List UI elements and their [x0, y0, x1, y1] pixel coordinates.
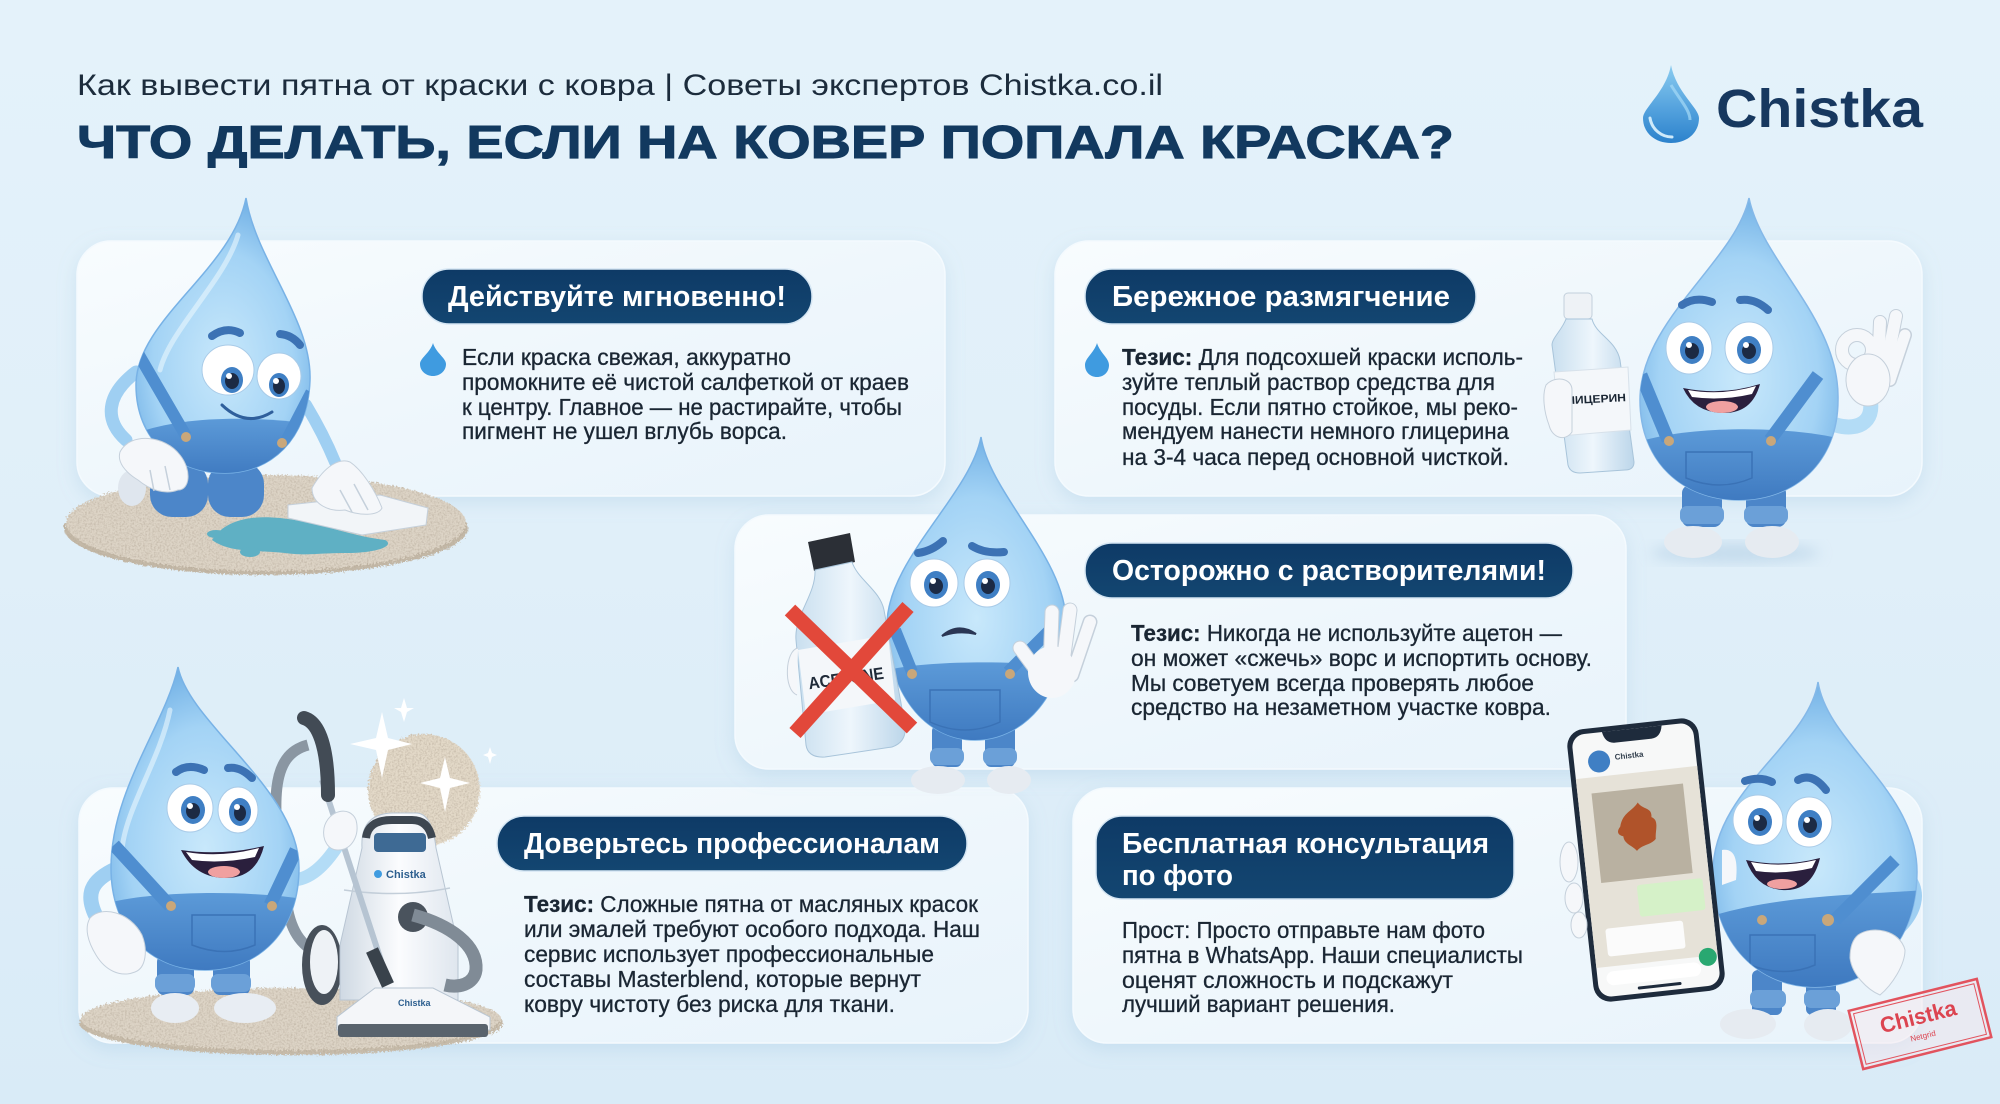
panel card [77, 241, 945, 496]
body text: к центру. Главное — не растирайте, чтобы [462, 394, 902, 420]
panel: act instantly [64, 198, 945, 575]
icon: holding glove [1544, 379, 1572, 438]
logo wordmark: Chistka [1716, 79, 1924, 139]
illustration: worried mascot with acetone bottle [787, 437, 1090, 794]
heading pill: Осторожно с растворителями! [1112, 555, 1546, 587]
illustration: mascot dabbing paint on rug [64, 198, 468, 575]
icon: glycerin bottle: ГЛИЦЕРИН [1560, 392, 1626, 408]
heading pill [1085, 269, 1476, 324]
icon: bullet drop [1085, 343, 1109, 377]
body text: лучший вариант решения. [1122, 991, 1395, 1017]
body text: ковру чистоту без риска для ткани. [524, 991, 895, 1017]
body text: промокните её чистой салфеткой от краев [462, 369, 909, 395]
body text: пигмент не ушел вглубь ворса. [462, 418, 787, 444]
body text [1122, 344, 1523, 470]
body text: Мы советуем всегда проверять любое [1131, 670, 1534, 696]
icon: stop hand [1020, 610, 1090, 698]
body text: оценят сложность и подскажут [1122, 967, 1453, 993]
subtitle: Как вывести пятна от краски с ковра | Советы экспертов Chistka.co.il [77, 69, 1163, 102]
body text [524, 891, 980, 1017]
panel: free photo consultation [1073, 682, 1991, 1069]
body text [1122, 917, 1523, 1017]
panel card [1055, 241, 1922, 496]
heading pill: Доверьтесь профессионалам [524, 828, 940, 860]
body text: Тезис: Сложные пятна от масляных красок [524, 891, 979, 917]
heading pill: Действуйте мгновенно! [448, 281, 786, 313]
body text: Тезис: Никогда не используйте ацетон — [1131, 620, 1562, 646]
panel: gentle softening [1055, 198, 1922, 563]
heading pill: по фото [1122, 860, 1233, 892]
body text: составы Masterblend, которые вернут [524, 966, 921, 992]
illustration: mascot with vacuum [79, 667, 503, 1055]
body text: зуйте теплый раствор средства для [1122, 369, 1495, 395]
icon: phone with WhatsApp chat: Chistka [1614, 750, 1644, 762]
illustration: mascot with glycerin bottle [1544, 198, 1905, 563]
heading pill: Бережное размягчение [1112, 281, 1450, 313]
body text: средство на незаметном участке ковра. [1131, 694, 1551, 720]
stamp: Netgrid [1909, 1029, 1937, 1044]
title: ЧТО ДЕЛАТЬ, ЕСЛИ НА КОВЕР ПОПАЛА КРАСКА? [77, 116, 1454, 168]
heading pill [1096, 816, 1514, 899]
icon: bullet drop [420, 343, 446, 376]
heading pill [422, 269, 812, 324]
illustration: mascot with vacuum: Chistka [386, 869, 427, 881]
icon: acetone bottle: ACETONE [807, 664, 885, 693]
body text: на 3-4 часа перед основной чисткой. [1122, 444, 1509, 470]
heading pill: Бесплатная консультация [1122, 828, 1489, 860]
illustration: mascot with vacuum: Chistka [398, 998, 432, 1008]
body text: или эмалей требуют особого подхода. Наш [524, 916, 980, 942]
heading pill [497, 816, 967, 871]
icon: phone holding fingers [1560, 842, 1587, 938]
panel: careful with solvents [735, 437, 1626, 794]
body text [1131, 620, 1592, 720]
body text: мендуем нанести немного глицерина [1122, 418, 1509, 444]
icon: logo water drop [1643, 65, 1699, 143]
panel card [1073, 788, 1922, 1043]
body text [462, 344, 909, 444]
body text: Прост: Просто отправьте нам фото [1122, 917, 1485, 943]
illustration: mascot with phone [1560, 682, 1991, 1069]
body text: пятна в WhatsApp. Наши специалисты [1122, 942, 1523, 968]
stamp: Chistka [1877, 995, 1960, 1038]
icon: OK hand [1842, 316, 1905, 406]
icon: acetone bottle [787, 533, 905, 757]
logo [1643, 65, 1924, 143]
icon: glycerin bottle [1552, 293, 1634, 473]
panel: trust the professionals [79, 667, 1028, 1055]
stamp [1849, 979, 1991, 1069]
body text: он может «сжечь» ворс и испортить основу. [1131, 645, 1592, 671]
panel card [735, 515, 1626, 769]
body text: Если краска свежая, аккуратно [462, 344, 791, 370]
body text: Тезис: Для подсохшей краски исполь- [1122, 344, 1523, 370]
heading pill [1085, 543, 1573, 598]
panel card [79, 788, 1028, 1043]
body text: сервис использует профессиональные [524, 941, 934, 967]
icon: phone with WhatsApp chat [1566, 717, 1726, 1003]
body text: посуды. Если пятно стойкое, мы реко- [1122, 394, 1518, 420]
icon: red cross [790, 607, 912, 733]
